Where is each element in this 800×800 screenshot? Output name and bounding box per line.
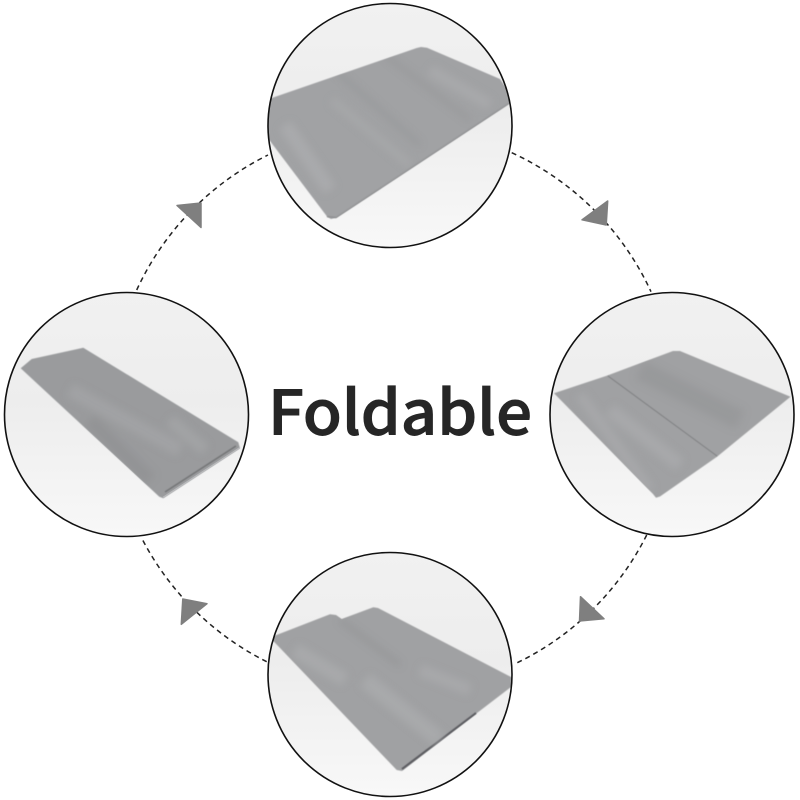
panel: right circle, mat with one fold bbox=[550, 292, 794, 536]
arrowhead: top-left bbox=[177, 203, 201, 228]
mat: folded lengthwise bbox=[21, 348, 240, 498]
mat: unfolded bbox=[264, 47, 514, 219]
panel: left circle, mat folded lengthwise bbox=[4, 292, 248, 536]
mat: two folds bbox=[270, 607, 513, 771]
arrowhead: bottom-left bbox=[181, 599, 207, 624]
arrowhead: bottom-right bbox=[580, 597, 604, 621]
arrow path: top-left arc bbox=[137, 155, 268, 290]
panel: top circle, mat fully unfolded bbox=[264, 4, 514, 248]
title: Foldable bbox=[268, 363, 532, 452]
mat: one fold bbox=[554, 351, 790, 498]
arrow path: bottom-right arc bbox=[517, 535, 647, 663]
arrow path: bottom-left arc bbox=[142, 539, 267, 662]
arrowhead: top-right bbox=[582, 201, 608, 225]
arrow path: top-right arc bbox=[512, 153, 651, 292]
panel: bottom circle, mat with two folds bbox=[268, 552, 513, 796]
